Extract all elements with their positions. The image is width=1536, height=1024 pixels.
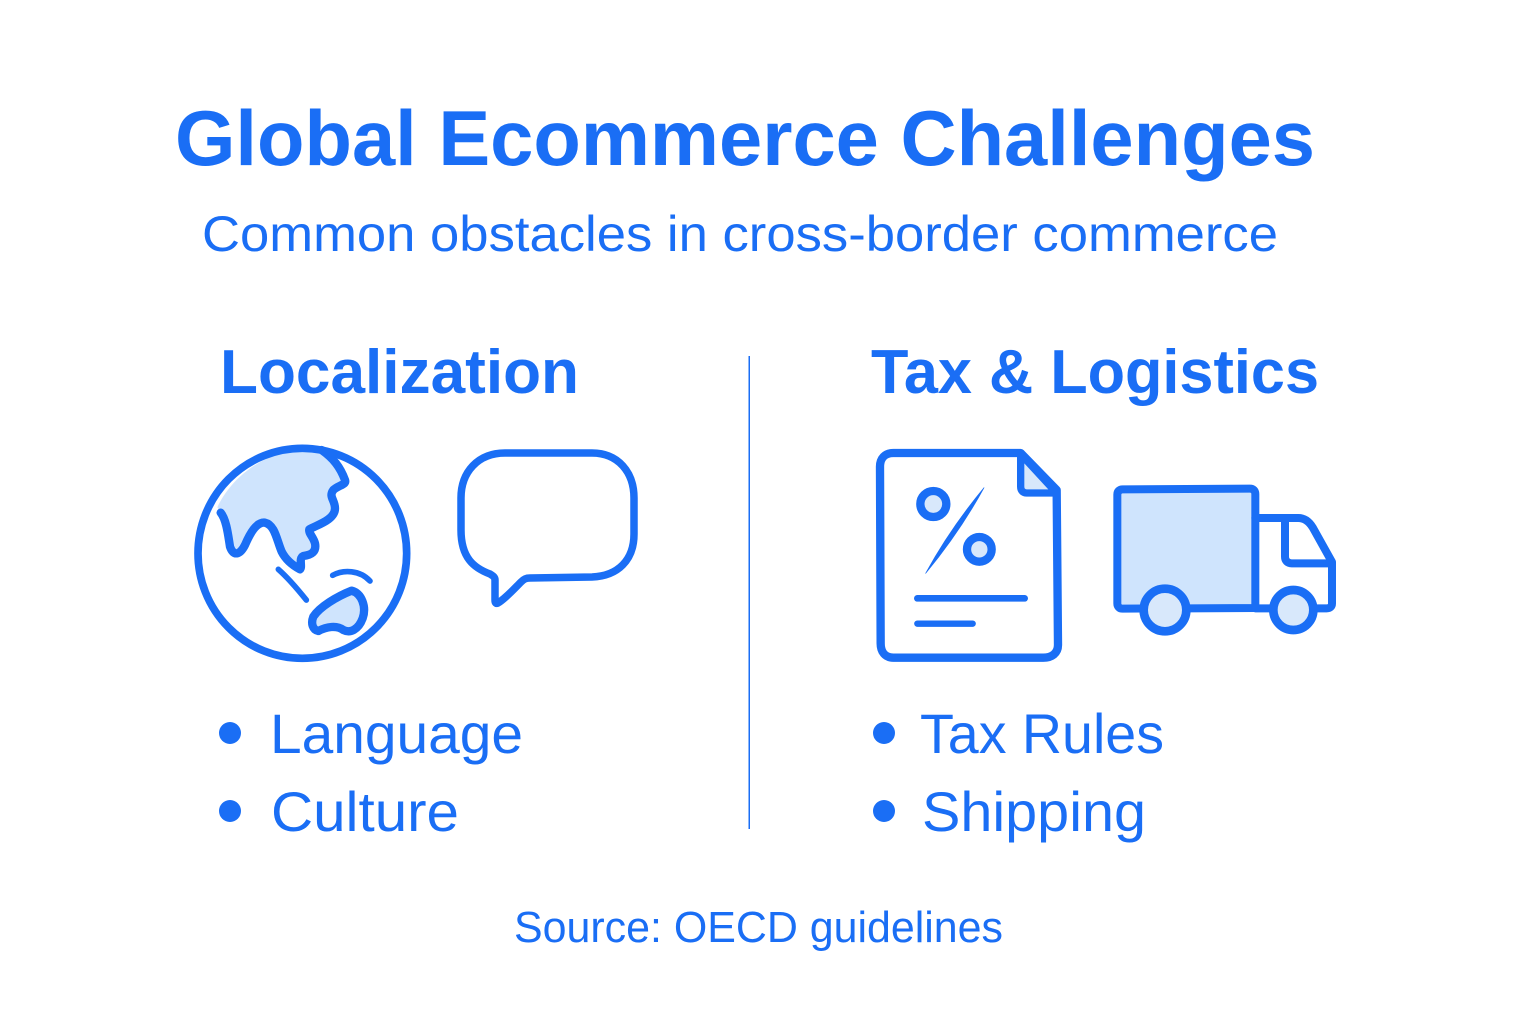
panel: localization <box>198 338 634 843</box>
bullet list: tax and logistics <box>873 702 1164 843</box>
panel: tax and logistics <box>871 338 1332 843</box>
title: Global Ecommerce Challenges <box>175 94 1315 182</box>
subtitle: Common obstacles in cross-border commerce <box>202 206 1278 262</box>
icon: speech bubble <box>461 453 634 603</box>
bullet list: tax and logistics: Shipping <box>922 780 1146 843</box>
bullet list: tax and logistics: Tax Rules <box>920 702 1164 765</box>
icon: globe <box>198 447 407 658</box>
heading: tax and logistics: Tax & Logistics <box>871 338 1319 407</box>
bullet list: localization <box>219 702 523 843</box>
bullet list: localization: Language <box>270 702 523 765</box>
bullet list: localization: Culture <box>271 780 459 843</box>
icon: tax document <box>880 453 1058 658</box>
source note: Source: OECD guidelines <box>514 903 1003 952</box>
heading: localization: Localization <box>220 338 579 407</box>
icon: delivery truck <box>1117 489 1332 631</box>
